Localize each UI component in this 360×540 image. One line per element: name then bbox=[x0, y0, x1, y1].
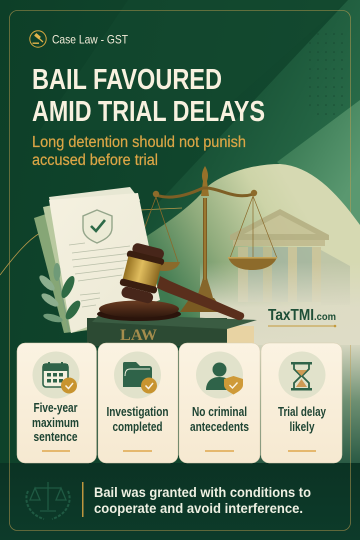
footer text: cooperate and avoid interference. bbox=[94, 501, 303, 516]
scale beam bbox=[156, 188, 254, 197]
category label: Case Law - GST bbox=[52, 32, 129, 46]
card: trial delay likely bbox=[261, 343, 342, 463]
mist over the ground bbox=[200, 262, 360, 345]
law book bbox=[87, 314, 257, 346]
card label bbox=[278, 405, 326, 434]
TaxTMI logo: .com bbox=[314, 312, 336, 323]
footer emblem: scale and laurel bbox=[26, 482, 70, 519]
icon: hourglass bbox=[291, 362, 312, 390]
courthouse bbox=[230, 209, 350, 305]
thin gold curve bbox=[0, 208, 182, 275]
TaxTMI logo: TaxTMI bbox=[268, 307, 314, 324]
footer text: Bail was granted with conditions to bbox=[94, 485, 311, 500]
card: five-year sentence bbox=[17, 343, 96, 463]
gavel bbox=[97, 241, 244, 321]
subtitle: Long detention should not punish bbox=[32, 134, 246, 151]
TaxTMI logo bbox=[268, 307, 336, 327]
card label: antecedents bbox=[190, 420, 249, 434]
card: investigation completed bbox=[98, 343, 178, 463]
scale base and pole bbox=[180, 166, 224, 312]
dotted texture bbox=[309, 33, 343, 115]
card label: completed bbox=[112, 420, 162, 434]
card label: sentence bbox=[34, 430, 78, 444]
category tag bbox=[30, 31, 129, 47]
card: no criminal antecedents bbox=[179, 343, 260, 463]
legal documents bbox=[34, 187, 160, 333]
icon: gavel badge bbox=[30, 31, 46, 47]
title: AMID TRIAL DELAYS bbox=[32, 96, 265, 128]
card label bbox=[32, 401, 79, 444]
light hill backdrop bbox=[141, 164, 360, 345]
document text lines bbox=[69, 243, 133, 307]
card label: Five-year bbox=[34, 401, 78, 415]
icon: shield check bbox=[83, 210, 112, 243]
right pan bbox=[228, 196, 277, 270]
icon: person with shield bbox=[206, 362, 243, 394]
icon: folder bbox=[123, 362, 157, 394]
card label: Investigation bbox=[106, 405, 168, 419]
footer divider bbox=[82, 482, 84, 517]
sound block bbox=[97, 300, 181, 321]
subtitle bbox=[32, 134, 246, 169]
card label: Trial delay bbox=[278, 405, 326, 419]
subtitle: accused before trial bbox=[32, 152, 158, 169]
title: BAIL FAVOURED bbox=[32, 64, 222, 96]
card label bbox=[190, 405, 249, 434]
gavel head bbox=[117, 241, 167, 305]
footer text bbox=[94, 485, 311, 516]
balance scale bbox=[139, 166, 277, 312]
title bbox=[32, 64, 265, 128]
book title: LAW bbox=[120, 327, 157, 344]
card label bbox=[106, 405, 168, 434]
gavel handle bbox=[157, 276, 244, 320]
left pan bbox=[139, 197, 180, 271]
icon: calendar bbox=[43, 362, 77, 394]
card label: maximum bbox=[32, 416, 79, 430]
illustration: legal scene bbox=[0, 164, 360, 346]
card label: likely bbox=[290, 420, 315, 434]
card label: No criminal bbox=[192, 405, 247, 419]
olive branch bbox=[37, 263, 83, 332]
